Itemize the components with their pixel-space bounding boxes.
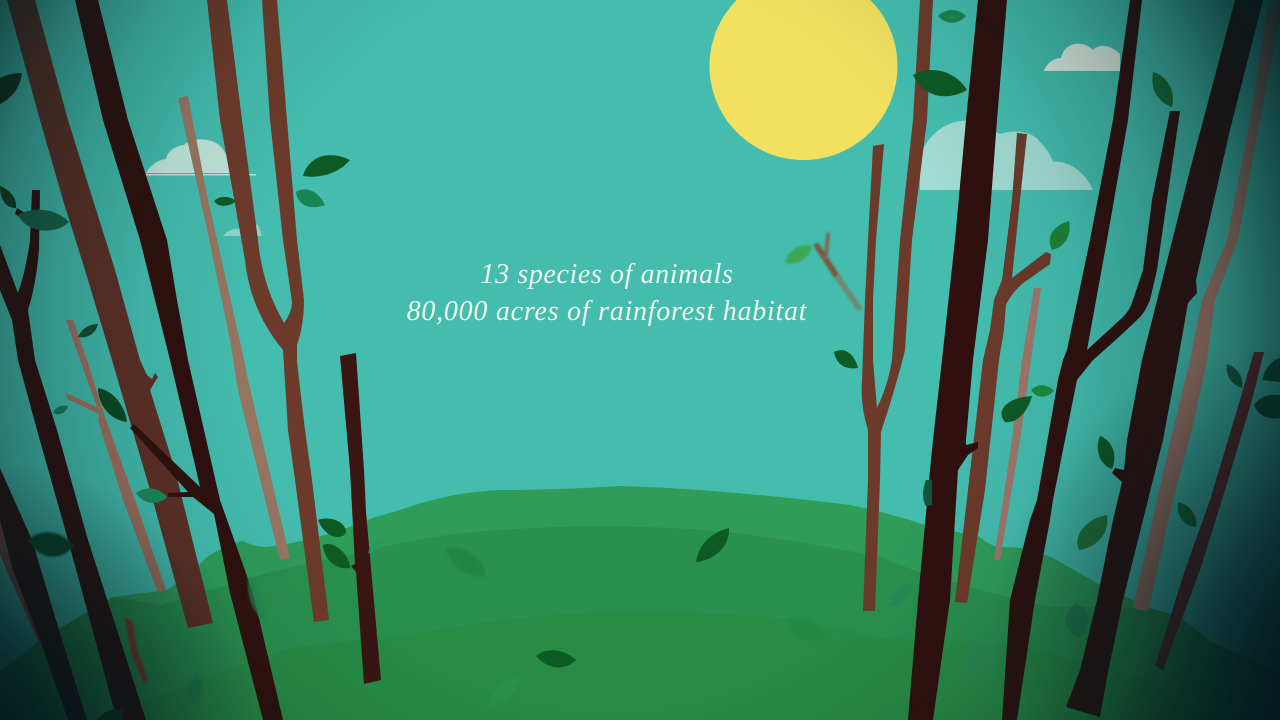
leaf <box>98 388 127 422</box>
tree: big dark center-right <box>908 0 1007 720</box>
leaf <box>1152 72 1173 107</box>
leaf <box>1077 515 1107 550</box>
leaf <box>1065 603 1088 638</box>
leaf <box>962 640 1002 676</box>
hill: middle <box>0 526 1280 720</box>
leaf <box>785 245 812 264</box>
leaf <box>186 672 202 705</box>
leaf <box>368 536 385 553</box>
leaf <box>536 650 576 667</box>
tree: thin left brown <box>66 320 166 593</box>
leaf <box>136 488 167 503</box>
trees: right group <box>862 0 1280 720</box>
cloud: top right <box>1044 44 1120 71</box>
caption line 1: 13 species of animals <box>481 259 733 290</box>
leaf <box>938 10 966 23</box>
leaf <box>923 480 932 506</box>
tree: far left large trunk <box>7 0 213 628</box>
leaf <box>78 324 98 337</box>
leaf <box>0 186 16 208</box>
hill: back <box>0 486 1280 720</box>
leaf <box>18 210 69 231</box>
sun <box>710 0 898 160</box>
leaf <box>296 189 325 207</box>
leaf <box>834 350 858 368</box>
tree: far right big dark <box>1066 0 1263 717</box>
leaf <box>888 582 913 607</box>
leaf <box>318 518 346 537</box>
falling twig bottom left <box>125 618 148 684</box>
leaf <box>323 544 350 568</box>
tree: light brown thin <box>178 96 290 560</box>
leaf <box>1098 436 1114 469</box>
leaf <box>0 73 22 104</box>
leaf <box>486 674 522 708</box>
falling branch <box>817 234 859 308</box>
leaf <box>53 406 68 414</box>
tree: medium brown forked <box>955 133 1051 603</box>
leaf <box>214 197 236 206</box>
hill: front <box>100 612 1213 720</box>
tree: light thin <box>994 288 1041 560</box>
cloud: small left <box>223 224 262 236</box>
tree: dark forked right <box>1002 0 1180 720</box>
tree: forked thin brown <box>862 0 933 611</box>
leaf <box>1254 395 1280 418</box>
cloud: left <box>146 139 256 176</box>
leaf <box>1262 358 1280 382</box>
tree: forked brown <box>207 0 329 622</box>
leaf <box>97 709 124 720</box>
cloud: large right <box>920 121 1093 190</box>
tree: bottom left dark <box>0 468 87 720</box>
leaf <box>1227 364 1242 388</box>
leaf <box>913 70 967 96</box>
tree: right thin brown <box>1133 0 1280 612</box>
leaf <box>696 528 729 562</box>
leaf <box>446 547 486 576</box>
tree: right small dark <box>1155 352 1264 670</box>
caption line 2: 80,000 acres of rainforest habitat <box>407 296 808 327</box>
tree: small dark center-left <box>340 353 381 684</box>
tree: dark tall trunk <box>75 0 283 720</box>
leaf <box>248 575 265 622</box>
leaf <box>1050 221 1070 250</box>
leaf <box>786 616 826 641</box>
leaf <box>28 532 74 557</box>
leaf <box>1001 396 1032 422</box>
tree: left edge forked dark <box>0 190 146 720</box>
trees: left group <box>0 0 381 720</box>
leaf <box>303 155 350 177</box>
leaf <box>1178 502 1196 527</box>
caption text <box>407 259 808 327</box>
leaf <box>1031 385 1054 397</box>
tree: bottom left pale thin <box>0 520 48 650</box>
